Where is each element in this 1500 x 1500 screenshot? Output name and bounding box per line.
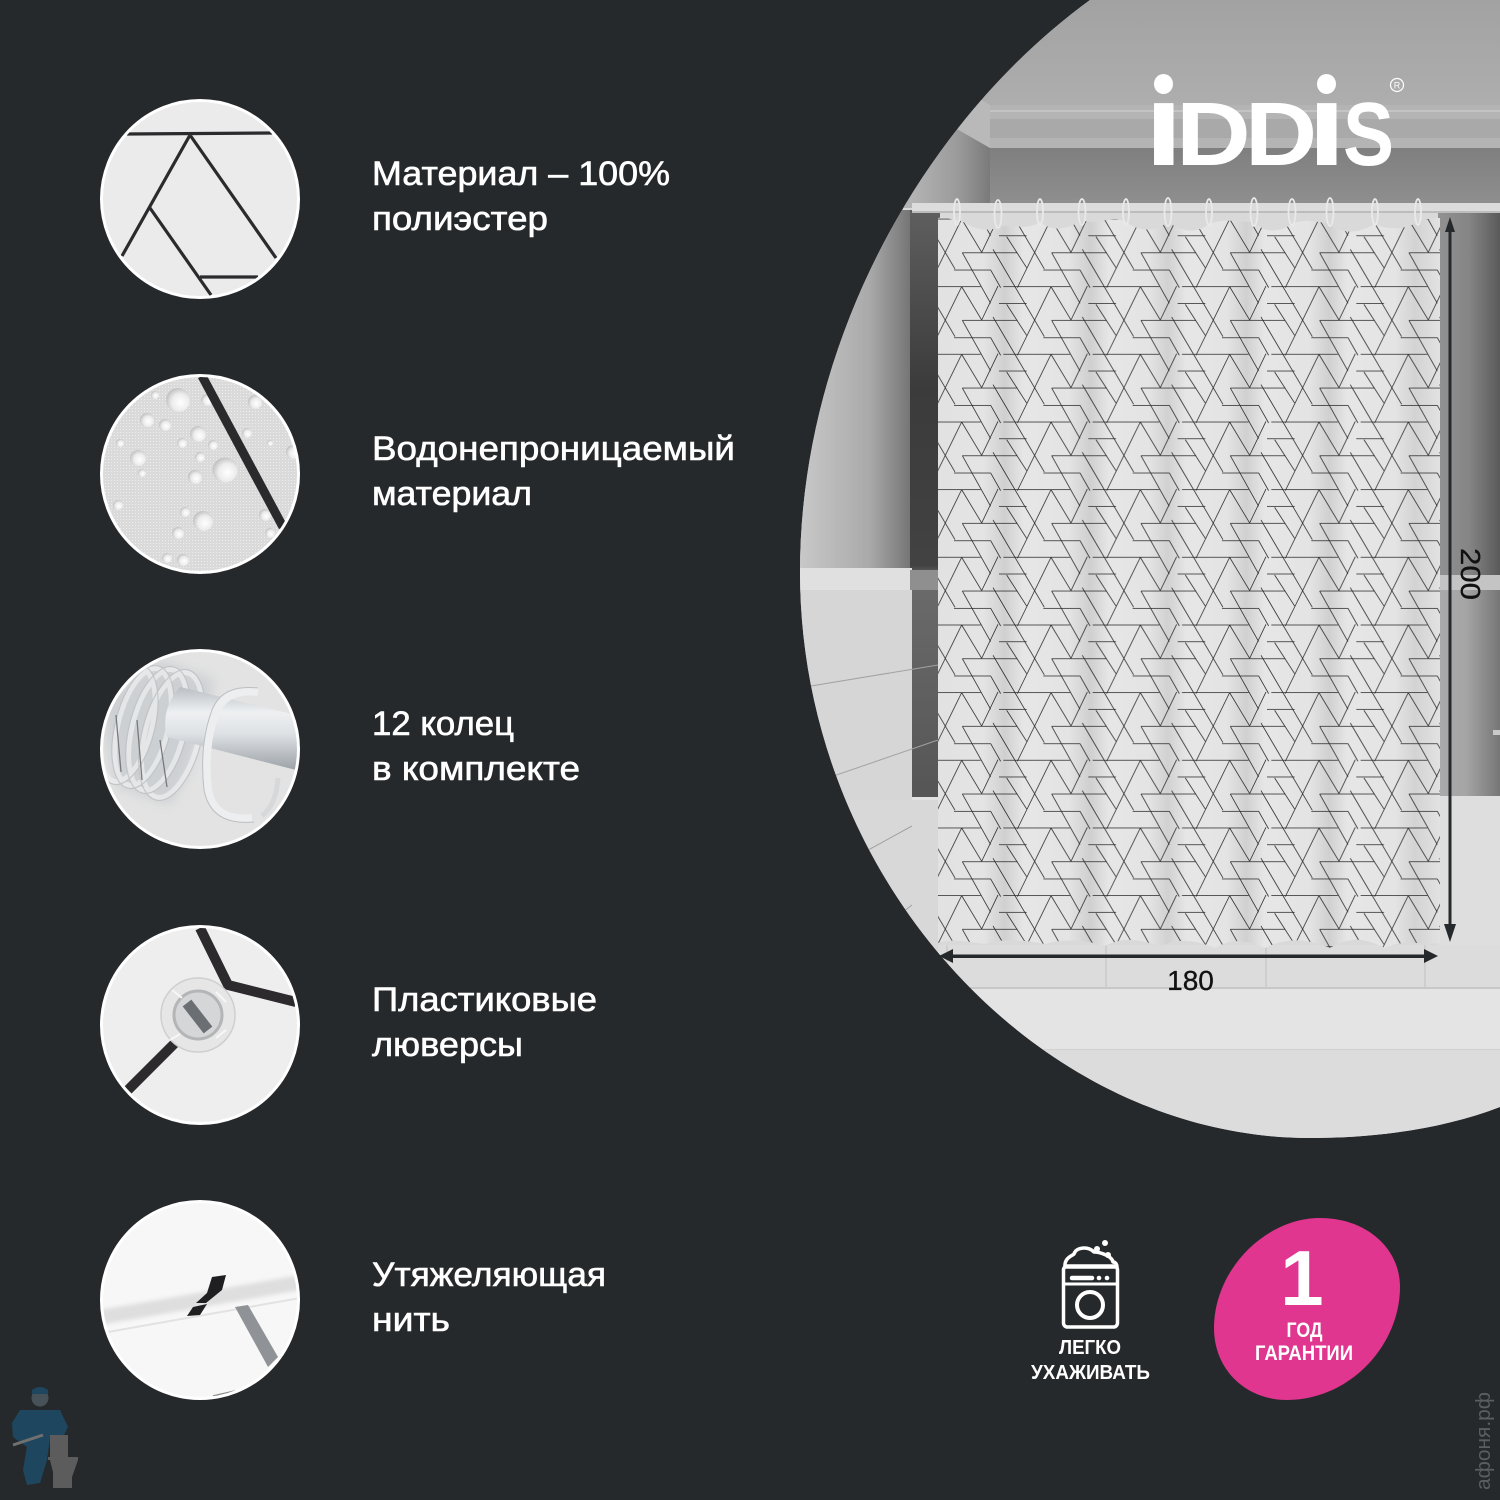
text: rings: в комплекте	[372, 750, 580, 788]
badge: easy care	[1031, 1240, 1150, 1384]
text: grommets	[372, 981, 597, 1064]
icon: rings on a rod	[103, 652, 297, 846]
panel: bathroom photo blob	[790, 0, 1500, 1141]
label: warranty	[1255, 1319, 1353, 1365]
icon: water droplets on fabric	[100, 374, 300, 574]
logo: IDDIS	[1145, 74, 1404, 185]
logo: IDDIS: I	[1308, 84, 1346, 185]
text: weighted hem: Утяжеляющая	[372, 1256, 606, 1294]
curtain rings	[954, 198, 1421, 228]
text: grommets: Пластиковые	[372, 981, 597, 1019]
text: weighted hem: нить	[372, 1301, 450, 1339]
feature 1: material	[100, 99, 670, 299]
text: material: полиэстер	[372, 200, 548, 238]
label: 180: 180	[1167, 965, 1214, 996]
text: waterproof: материал	[372, 475, 532, 513]
logo: IDDIS: D	[1176, 83, 1251, 184]
icon: fabric pattern close-up	[100, 99, 300, 299]
logo: IDDIS: R	[1394, 80, 1401, 90]
feature 5: weighted hem	[100, 1200, 606, 1400]
feature 3: rings	[87, 649, 580, 849]
text: weighted hem	[372, 1256, 606, 1339]
icon: plumber with toilet watermark	[12, 1387, 78, 1488]
logo: IDDIS: D	[1245, 85, 1317, 185]
label: easy care: УХАЖИВАТЬ	[1031, 1362, 1150, 1384]
icon: plastic grommet	[100, 925, 300, 1125]
logo: IDDIS: I	[1145, 84, 1183, 185]
text: material	[372, 155, 670, 238]
logo: IDDIS: S	[1343, 83, 1394, 184]
icon: washing machine	[1063, 1240, 1118, 1327]
feature 2: waterproof	[100, 374, 735, 574]
text: rings: 12 колец	[372, 705, 514, 743]
number: 1: 1	[1280, 1234, 1324, 1322]
text: waterproof	[372, 430, 735, 513]
shower rod	[912, 203, 1500, 213]
text: material: Материал – 100%	[372, 155, 670, 193]
text: waterproof: Водонепроницаемый	[372, 430, 735, 468]
label: easy care	[1031, 1337, 1150, 1384]
label: warranty: ГОД	[1286, 1319, 1323, 1342]
feature 4: grommets	[100, 925, 597, 1125]
text: grommets: люверсы	[372, 1026, 523, 1064]
label: warranty: ГАРАНТИИ	[1255, 1342, 1353, 1365]
watermark: site name: афоня.рф	[1473, 1392, 1495, 1490]
label: easy care: ЛЕГКО	[1059, 1337, 1121, 1359]
arrow: height 200	[1444, 217, 1456, 942]
curtain	[930, 205, 1450, 955]
arrow: width 180	[939, 949, 1438, 963]
label: 200: 200	[1455, 548, 1486, 600]
badge: 1 year warranty	[1214, 1218, 1400, 1400]
icon: weighted thread hem	[100, 1200, 300, 1400]
text: rings	[372, 705, 580, 788]
